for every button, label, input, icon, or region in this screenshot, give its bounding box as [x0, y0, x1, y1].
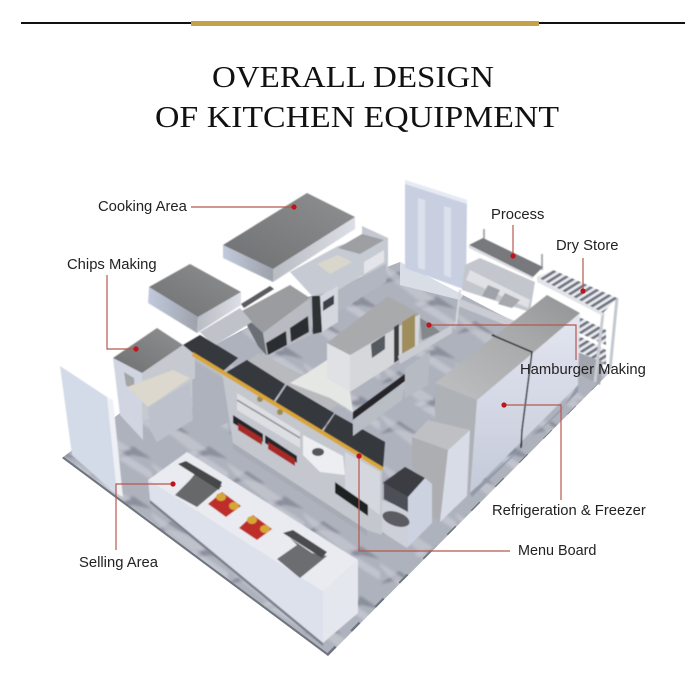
- callout: dry store: [556, 238, 618, 294]
- left door: [60, 366, 123, 497]
- hood: cooking area: [223, 193, 355, 282]
- process work tables and shelf: [456, 229, 543, 330]
- kitchen floor: [50, 250, 620, 665]
- callout: dry store: Dry Store: [556, 238, 618, 254]
- title: OVERALL DESIGN: [212, 59, 494, 94]
- callout: selling area: Selling Area: [79, 555, 159, 571]
- callout: chips making: Chips Making: [67, 257, 157, 273]
- title: OF KITCHEN EQUIPMENT: [155, 99, 559, 134]
- black overhead menu band: [183, 335, 385, 471]
- top rule: [21, 21, 685, 26]
- title: [155, 59, 559, 134]
- soft serve machine: [381, 467, 432, 548]
- callout: hamburger making: [426, 322, 646, 378]
- POS terminal left: [175, 461, 222, 507]
- cooking line equipment: [200, 226, 388, 356]
- callout: refrigeration and freezer: [492, 402, 646, 519]
- back door: [405, 180, 467, 290]
- central island: [290, 296, 452, 436]
- callout: chips making: [67, 257, 157, 352]
- callout: cooking area: Cooking Area: [98, 199, 188, 215]
- callout: process: [491, 207, 544, 259]
- callout: refrigeration and freezer: Refrigeration & Freezer: [492, 503, 646, 519]
- selling counter: [148, 452, 358, 646]
- callout: cooking area: [98, 199, 297, 215]
- callout: selling area: [79, 481, 176, 571]
- food tray right: [239, 515, 272, 540]
- dry store rack: [537, 270, 617, 385]
- chips making station: [113, 328, 233, 442]
- callout: hamburger making: Hamburger Making: [520, 362, 646, 378]
- food tray left: [208, 492, 241, 517]
- central counter with hot shelf: [222, 372, 382, 536]
- refrigeration and freezer units: [412, 295, 580, 522]
- hood: middle: [148, 264, 241, 333]
- steel strip behind menu band: [247, 353, 345, 410]
- callout: process: Process: [491, 207, 544, 223]
- callout: menu board: Menu Board: [518, 543, 596, 559]
- POS terminal right: [277, 530, 327, 578]
- callout: menu board: [356, 453, 596, 559]
